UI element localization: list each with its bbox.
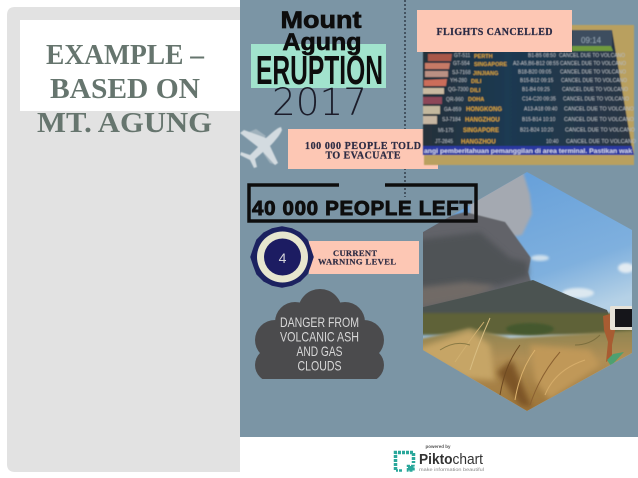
heading: example based on Mt. Agung — [37, 40, 212, 139]
danger cloud text: VOLCANIC ASH — [280, 328, 359, 344]
heading: example based on Mt. Agung: MT. AGUNG — [37, 108, 212, 139]
danger cloud text: DANGER FROM — [280, 314, 359, 330]
photo: flight departures board: CANCEL DUE TO VOLCANO — [562, 87, 628, 93]
photo: hexagon of erupting volcano — [415, 172, 638, 415]
photo: flight departures board: HANGZHOU — [465, 118, 500, 124]
panel: flights cancelled callout — [417, 10, 572, 52]
foreground grass — [415, 328, 638, 415]
photo: flight departures board: C14-C20 09:35 — [522, 96, 556, 102]
powered by: powered by — [425, 444, 451, 449]
high light ash — [470, 172, 532, 245]
photo: flight departures board: CANCEL DUE TO VOLCANO — [565, 128, 635, 134]
tagline: make information beautiful — [419, 467, 484, 472]
photo: flight departures board: MI-175 — [438, 128, 454, 134]
photo: flight departures board: SJ-7168 — [452, 70, 471, 76]
title: 2017: 2017 — [272, 81, 367, 124]
icon: warning level badge — [251, 227, 313, 287]
photo: flight departures board: CANCEL DUE TO VOLCANO — [564, 106, 634, 112]
photo: flight departures board: CANCEL DUE TO VOLCANO — [563, 96, 629, 102]
photo: flight departures board: B1-B5 08:50 — [528, 53, 556, 59]
danger cloud text — [280, 314, 359, 374]
Piktochart wordmark: Piktochart — [419, 451, 484, 468]
panel: current warning level callout: CURRENT — [333, 248, 377, 258]
photo: flight departures board: GA-859 — [444, 107, 461, 113]
title: Mount Agung: Agung — [282, 29, 362, 56]
photo: flight departures board: QR-960 — [446, 97, 464, 103]
photo: flight departures board: A2-A5,B6-B12 08:55 — [513, 61, 559, 67]
panel: evacuate callout — [288, 129, 438, 169]
scrolling notice band — [423, 146, 634, 155]
photo: flight departures board: CANCEL DUE TO VOLCANO — [560, 70, 626, 76]
photo: flight departures board: B18-B20 09:05 — [518, 70, 552, 76]
photo: flight departures board: DILI — [470, 88, 481, 94]
panel: 40 000 people left box: 40 000 PEOPLE LEFT — [252, 197, 472, 220]
photo: flight departures board: B15-B12 09:15 — [520, 78, 554, 84]
photo: flight departures board: GT-511 — [454, 53, 471, 59]
photo: flight departures board: 10:40 — [546, 139, 559, 145]
photo: flight departures board: JINJIANG — [473, 71, 498, 77]
light clouds — [618, 263, 634, 273]
mountain slope — [423, 280, 609, 315]
distant vegetation — [415, 313, 638, 335]
icon: Piktochart logo — [396, 452, 414, 470]
main ash cloud — [423, 212, 532, 308]
panel: evacuate callout: TO EVACUATE — [326, 150, 401, 162]
photo: flight departures board: HONGKONG — [466, 107, 502, 113]
title block: Mount Agung Eruption 2017 — [251, 7, 386, 124]
title: Mount Agung: Mount — [280, 7, 362, 34]
photo: flight departures board: angi pemberitahuan pemanggilan di area terminal. Pastikan wak — [424, 148, 632, 155]
photo: flight departures board: PERTH — [474, 54, 493, 60]
danger cloud text: CLOUDS — [298, 358, 342, 374]
danger cloud text: AND GAS — [296, 343, 342, 359]
title: Eruption: ERUPTION — [256, 47, 383, 93]
panel: current warning level callout: WARNING LEVEL — [318, 256, 396, 266]
grass blade strokes — [440, 318, 600, 405]
photo: flight departures board: HANGZHOU — [461, 140, 496, 146]
photo: flight departures board: A13-A18 09:40 — [524, 106, 558, 112]
photo: flight departures board: GT-554 — [453, 61, 470, 67]
panel: evacuate callout: 100 000 PEOPLE TOLD — [305, 141, 421, 152]
photo: flight departures board: DILI — [471, 79, 482, 85]
title: Mount Agung — [280, 7, 362, 56]
divider dotted line — [404, 0, 406, 197]
photo: flight departures board: B1-B4 09:25 — [522, 87, 550, 93]
warning level number: 4 — [279, 250, 287, 266]
photo: flight departures board: CANCEL DUE TO VOLCANO — [566, 139, 636, 145]
photo: flight departures board: SJ-7184 — [442, 117, 461, 123]
photo: flight departures board: CANCEL DUE TO VOLCANO — [559, 53, 625, 59]
photo: flight departures board: B21-B24 10:20 — [520, 128, 554, 134]
panel: flights cancelled callout: FLIGHTS CANCELLED — [436, 27, 552, 38]
photo: flight departures board: CANCEL DUE TO VOLCANO — [560, 61, 626, 67]
photo: flight departures board: 09:14 — [581, 36, 602, 45]
heading: example based on Mt. Agung: EXAMPLE – — [46, 40, 205, 71]
photo: flight departures board: SINGAPORE — [463, 128, 499, 134]
footer: Piktochart credit — [396, 444, 484, 472]
panel: left grey background — [7, 7, 240, 472]
photo: flight departures board: CANCEL DUE TO VOLCANO — [564, 117, 634, 123]
photo: flight departures board: DOHA — [468, 97, 484, 103]
photo: flight departures board: SINGAPORE — [474, 62, 507, 68]
panel: danger cloud — [255, 289, 384, 382]
icon: airplane — [240, 127, 282, 168]
panel: infographic background — [240, 0, 638, 437]
photo: flight departures board: QG-7300 — [448, 87, 469, 93]
mint banner — [251, 44, 386, 88]
photo: flight departures board: CANCEL DUE TO VOLCANO — [561, 78, 627, 84]
panel: title white band — [20, 20, 240, 111]
photo: flight departures board: B15-B14 10:10 — [522, 117, 556, 123]
photo: flight departures board — [423, 25, 636, 165]
photo: flight departures board: JT-2845 — [435, 139, 453, 145]
panel: current warning level callout — [309, 241, 419, 274]
heading: example based on Mt. Agung: BASED ON — [50, 74, 200, 105]
panel: 40 000 people left box — [249, 185, 476, 221]
photo: flight departures board: YH-280 — [450, 78, 467, 84]
airline logos column — [423, 54, 452, 124]
hand holding phone — [603, 314, 616, 362]
